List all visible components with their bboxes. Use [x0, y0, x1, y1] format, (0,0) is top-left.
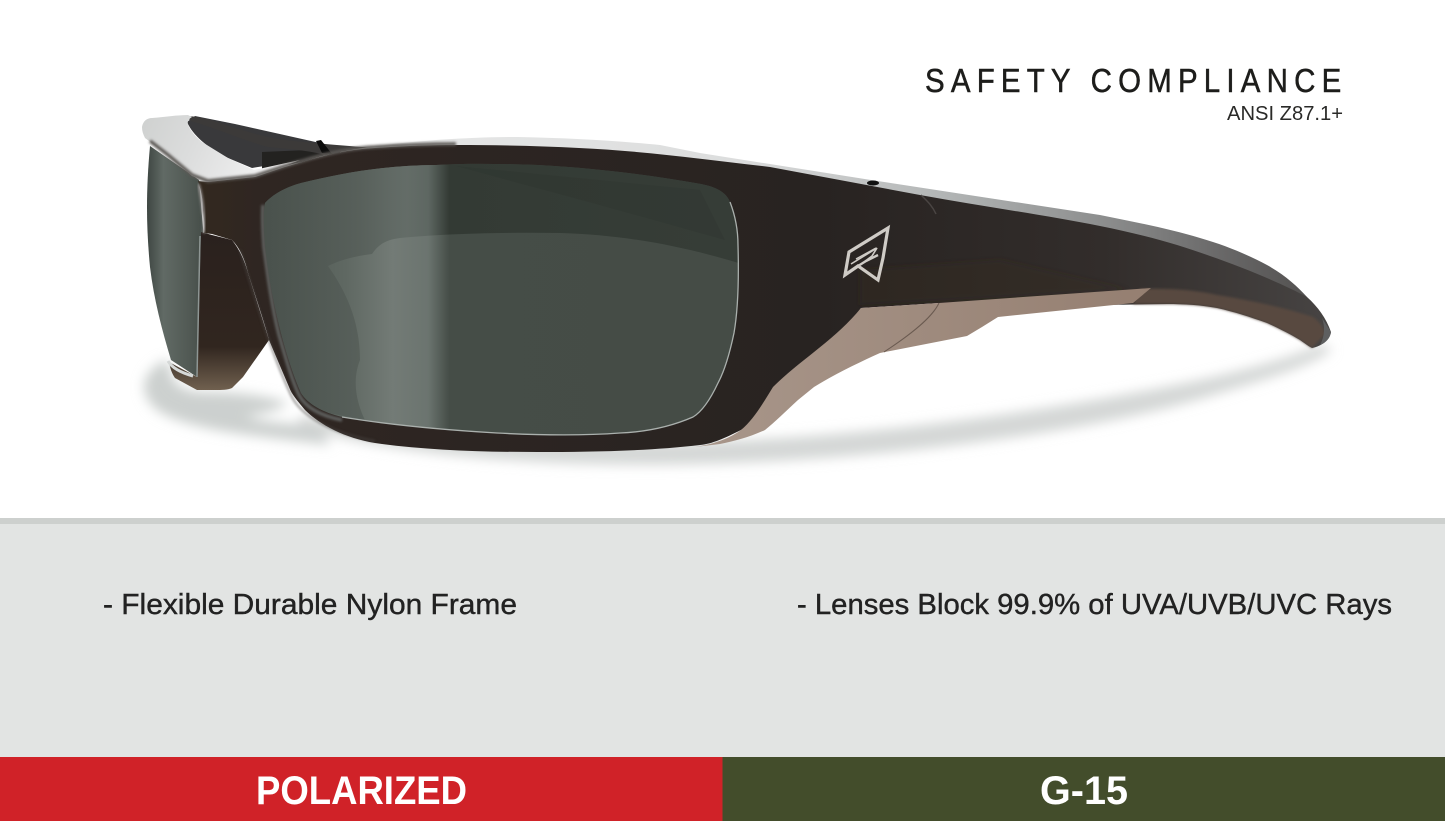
far lens bottom rim: [168, 361, 193, 376]
features panel: [0, 518, 1445, 757]
lens upper reflection: [260, 160, 745, 420]
taupe under-temple panel: [695, 288, 1151, 447]
ground shadow: [144, 344, 1332, 465]
main temple top band: [340, 137, 1307, 320]
banner: polarized: POLARIZED: [256, 769, 467, 813]
feature: frame: - Flexible Durable Nylon Frame: [103, 589, 517, 621]
heading: safety compliance: [925, 61, 1343, 125]
far frame top rim: [188, 116, 375, 155]
brown frame glow: [860, 260, 1130, 305]
heading: safety compliance: SAFETY COMPLIANCE: [925, 61, 1341, 99]
banner: lens colour: G-15: [1040, 769, 1128, 813]
brow lower rim: [150, 141, 456, 181]
banner: lens colour: [722, 757, 1445, 821]
tail grey tip: [1320, 318, 1331, 345]
near temple bridge arm: [169, 232, 269, 390]
compliance standard: ANSI Z87.1+: [1227, 103, 1343, 125]
temple seam: [884, 303, 939, 352]
lens edge highlight: [342, 202, 738, 435]
frame rim shading: [240, 250, 375, 441]
lens left rim: [263, 205, 342, 420]
banner: polarized: [0, 757, 722, 821]
sunglasses: [142, 115, 1331, 452]
main lens: [260, 160, 745, 440]
far lens: [147, 146, 204, 377]
brow highlight: [142, 115, 300, 182]
feature: lenses: - Lenses Block 99.9% of UVA/UVB/UVC Rays: [797, 589, 1392, 621]
logo: [845, 228, 888, 280]
tail brown underside: [1133, 289, 1325, 348]
frame body: [198, 145, 1331, 452]
near arm lens edge: [197, 236, 200, 377]
far temple through hole: [187, 116, 352, 168]
hinge dot: [867, 180, 879, 186]
nose highlight: [198, 184, 205, 233]
